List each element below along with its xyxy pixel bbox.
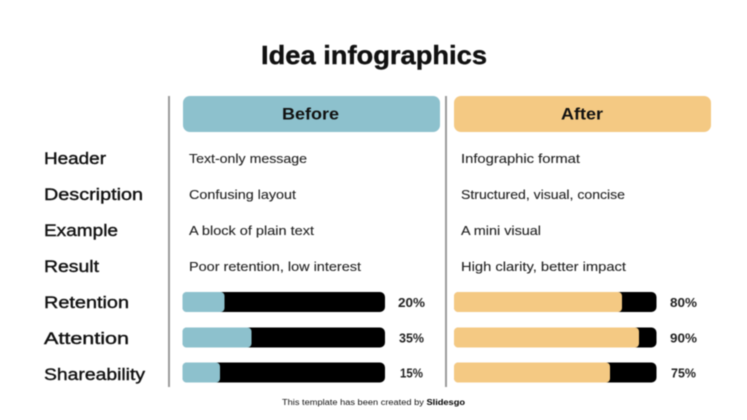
row labels: Example <box>44 221 118 240</box>
before column text: Poor retention, low interest <box>189 259 361 274</box>
after column text <box>461 151 626 274</box>
after column text: High clarity, better impact <box>461 259 626 274</box>
column dividers <box>168 96 447 387</box>
row labels <box>44 149 146 384</box>
bar: after attention 90%: 90% <box>670 332 697 346</box>
row labels: Header <box>44 149 106 168</box>
heading: After: After <box>561 104 603 124</box>
after column text: A mini visual <box>461 223 541 238</box>
footer credit: This template has been created by Slidesgo <box>282 398 465 407</box>
title: Idea infographics <box>261 40 487 70</box>
heading: Before <box>183 96 440 132</box>
bar: before retention 20% <box>182 292 425 312</box>
row labels: Retention <box>44 293 129 312</box>
heading: Before: Before <box>282 104 339 124</box>
bar: before shareability 15% <box>182 362 423 382</box>
before column text: Text-only message <box>189 151 307 166</box>
row labels: Result <box>44 257 99 276</box>
row labels: Description <box>44 185 143 204</box>
bar: before shareability 15%: 15% <box>400 366 423 380</box>
after column text: Infographic format <box>461 151 580 166</box>
row labels: Attention <box>44 329 129 348</box>
bar: after retention 80% <box>454 292 697 312</box>
bar: after shareability 75% <box>454 362 696 382</box>
bar: after shareability 75%: 75% <box>671 366 696 380</box>
bar: before attention 35% <box>182 328 424 348</box>
before column text <box>189 151 361 274</box>
bar: before attention 35%: 35% <box>399 332 424 346</box>
bar: before retention 20%: 20% <box>398 296 425 310</box>
before column text: Confusing layout <box>189 187 296 202</box>
row labels: Shareability <box>44 365 146 384</box>
heading: After <box>454 96 711 132</box>
after column text: Structured, visual, concise <box>461 187 625 202</box>
bar: after attention 90% <box>454 328 697 348</box>
before column text: A block of plain text <box>189 223 314 238</box>
bar: after retention 80%: 80% <box>670 296 697 310</box>
